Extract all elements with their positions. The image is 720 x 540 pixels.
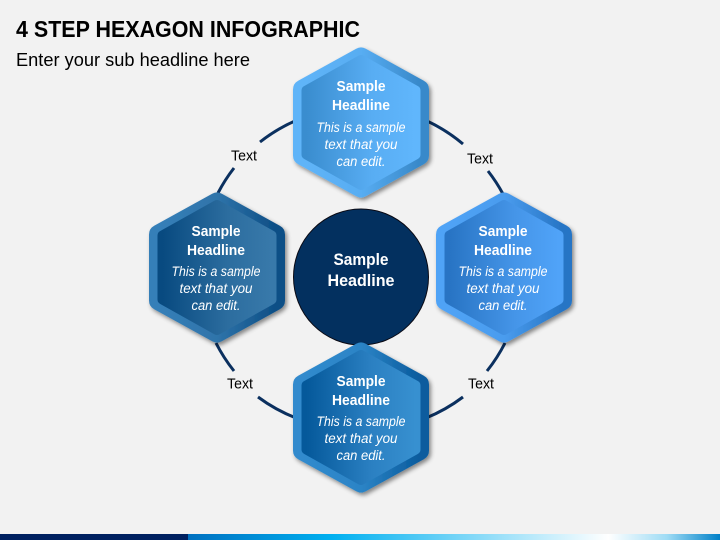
connector: top right with label: Text (467, 152, 493, 168)
hexagon: left: Sample (192, 223, 240, 240)
hexagon: top: Sample (336, 78, 386, 95)
hexagon: top: text that you (324, 137, 398, 152)
connector: bottom right with label: Text (468, 376, 494, 392)
center circle with headline: Sample (334, 250, 388, 269)
hexagon: bottom: text that you (324, 431, 398, 446)
hexagon: right: Headline (474, 242, 532, 259)
hexagon: right (446, 202, 562, 332)
hexagon: left: This is a sample (172, 264, 260, 279)
hexagon: bottom (303, 352, 419, 482)
hexagon: left (159, 202, 275, 332)
hexagon: left: text that you (180, 281, 253, 296)
hexagon: right: can edit. (478, 298, 528, 313)
hexagon: bottom: can edit. (336, 448, 386, 463)
center circle with headline: Headline (328, 271, 394, 290)
hexagon: right: Sample (478, 223, 528, 240)
hexagon: top: Headline (332, 97, 390, 114)
footer bar (0, 534, 720, 540)
subtitle: Enter your sub headline here (16, 49, 250, 70)
hexagon: bottom: Headline (332, 392, 390, 409)
title: 4 STEP HEXAGON INFOGRAPHIC (16, 16, 360, 42)
connector: bottom left with label (216, 343, 296, 418)
connector: top right with label (426, 120, 503, 194)
connector: bottom right with label (426, 343, 505, 418)
hexagon: bottom: This is a sample (316, 414, 406, 429)
hexagon: left: Headline (187, 242, 245, 259)
center circle with headline (294, 209, 428, 345)
connector: top left with label: Text (231, 148, 257, 164)
hexagon: right: This is a sample (458, 264, 548, 279)
hexagon: bottom: Sample (336, 373, 386, 390)
hexagon: left: can edit. (192, 298, 240, 313)
connector: top left with label (218, 120, 296, 193)
hexagon: right: text that you (466, 281, 540, 296)
hexagon: top (303, 58, 419, 188)
hexagon: top: can edit. (336, 154, 386, 169)
hexagon: top: This is a sample (316, 120, 406, 135)
connector: bottom left with label: Text (227, 376, 253, 392)
